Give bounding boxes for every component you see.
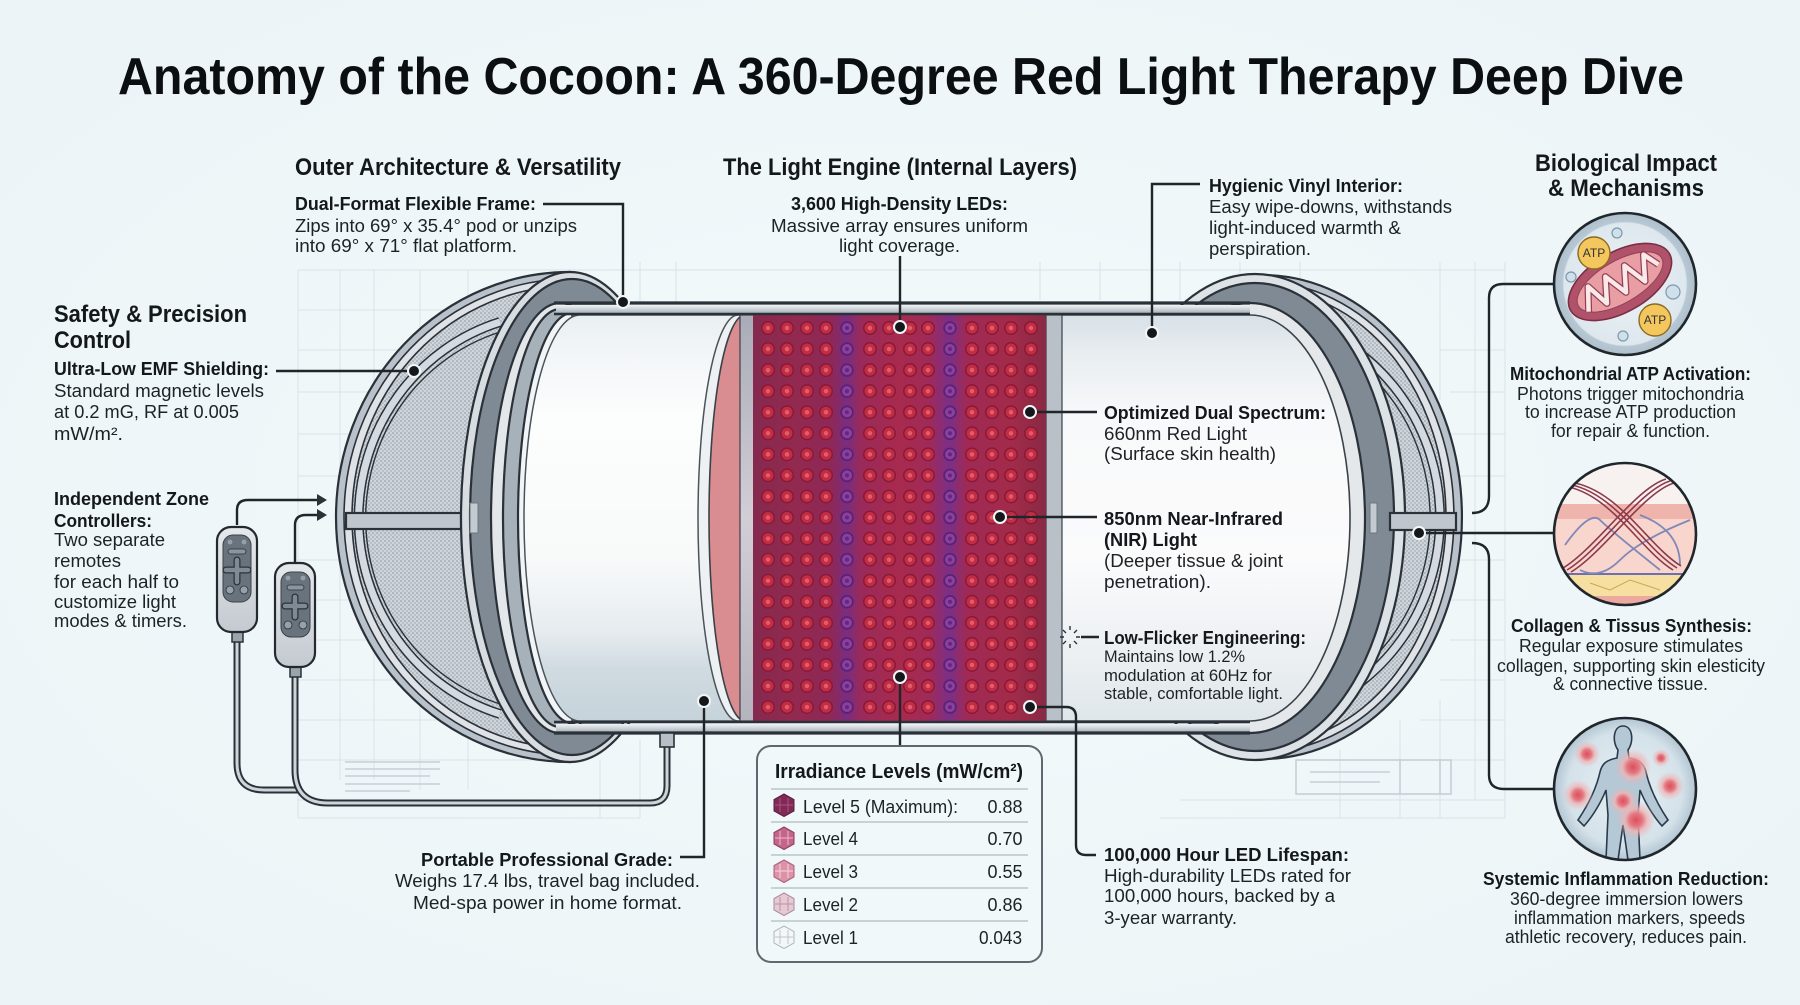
heading: safety and precision control: Safety & Precision bbox=[54, 301, 247, 328]
icon: collagen and skin layers bbox=[1552, 462, 1698, 606]
text: zone controllers: Independent Zone bbox=[54, 488, 209, 509]
blueprint notes block bbox=[345, 760, 1451, 794]
heading: safety and precision control bbox=[54, 301, 247, 354]
heading: light engine: The Light Engine (Internal Layers) bbox=[723, 154, 1077, 181]
row: level 5: 0.88 bbox=[987, 797, 1023, 817]
text: LED lifespan: High-durability LEDs rated for bbox=[1104, 866, 1351, 886]
illustration: cocoon pod bbox=[336, 272, 1462, 762]
heading: outer architecture: Outer Architecture & Versatility bbox=[295, 154, 622, 181]
heading: biological impact: & Mechanisms bbox=[1548, 175, 1704, 202]
text: dual spectrum bbox=[1104, 402, 1326, 464]
text: hygienic vinyl interior bbox=[1209, 175, 1452, 259]
text: near-infrared bbox=[1104, 508, 1283, 592]
text: hygienic vinyl interior: Easy wipe-downs, withstands bbox=[1209, 197, 1452, 217]
text: zone controllers: remotes bbox=[54, 551, 121, 571]
icon: mitochondrion: ATP bbox=[1644, 313, 1666, 327]
icon: flicker spark bbox=[1060, 626, 1080, 648]
text: inflammation reduction: athletic recovery, reduces pain. bbox=[1505, 927, 1747, 947]
right ring bbox=[1105, 274, 1456, 760]
LED panel bbox=[753, 315, 1046, 721]
text: 3,600 LEDs: 3,600 High-Density LEDs: bbox=[791, 193, 1008, 214]
text: EMF shielding: mW/m². bbox=[54, 424, 123, 444]
text: dual-format frame: into 69° x 71° flat platform. bbox=[295, 236, 517, 256]
text: low-flicker: modulation at 60Hz for bbox=[1104, 667, 1273, 685]
leader lines and dots bbox=[276, 184, 1553, 857]
title: Anatomy of the Cocoon: A 360-Degree Red Light Therapy Deep Dive bbox=[118, 48, 1684, 106]
text: near-infrared: (Deeper tissue & joint bbox=[1104, 551, 1283, 571]
text: mitochondrial ATP: to increase ATP production bbox=[1525, 402, 1736, 422]
text: LED lifespan: 100,000 Hour LED Lifespan: bbox=[1104, 844, 1349, 865]
arrows from remotes to pod bbox=[237, 494, 327, 563]
row: level 3 bbox=[774, 860, 1023, 882]
panel title: Irradiance Levels (mW/cm²) bbox=[775, 761, 1023, 783]
text: dual spectrum: (Surface skin health) bbox=[1104, 444, 1276, 464]
text: collagen synthesis: Regular exposure stimulates bbox=[1519, 636, 1743, 656]
remote cables bbox=[237, 642, 674, 803]
icon: mitochondrion bbox=[1554, 213, 1696, 355]
heading: biological impact bbox=[1535, 150, 1717, 202]
left mesh dome bbox=[336, 272, 570, 762]
row: level 2 bbox=[774, 893, 1023, 916]
white sliding cover bbox=[524, 315, 738, 721]
text: collagen synthesis: Collagen & Tissus Synthesis: bbox=[1511, 615, 1752, 636]
pink inner shell bbox=[700, 315, 742, 721]
remote 2 bbox=[275, 563, 315, 677]
text: mitochondrial ATP: Mitochondrial ATP Activation: bbox=[1510, 363, 1751, 384]
text: low-flicker: stable, comfortable light. bbox=[1104, 685, 1283, 703]
row: level 3: Level 3 bbox=[803, 862, 858, 882]
text: inflammation reduction: Systemic Inflammation Reduction: bbox=[1483, 868, 1769, 889]
text: mitochondrial ATP: Photons trigger mitochondria bbox=[1517, 384, 1745, 404]
text: LED lifespan bbox=[1104, 844, 1351, 928]
text: zone controllers: modes & timers. bbox=[54, 611, 187, 631]
heading: biological impact: Biological Impact bbox=[1535, 150, 1717, 177]
text: portable professional grade: Portable Professional Grade: bbox=[421, 849, 673, 870]
row: level 5 bbox=[774, 794, 1023, 817]
text: 3,600 LEDs: Massive array ensures uniform bbox=[771, 216, 1028, 236]
icon: body with inflammation points bbox=[1554, 718, 1696, 860]
text: EMF shielding bbox=[54, 358, 269, 444]
tube interior: vinyl right side bbox=[1050, 315, 1350, 721]
row: level 2: Level 2 bbox=[803, 895, 858, 915]
left ring bbox=[461, 272, 679, 762]
remote 1 bbox=[217, 527, 257, 642]
text: portable professional grade: Med-spa power in home format. bbox=[413, 893, 682, 913]
text: near-infrared: (NIR) Light bbox=[1104, 529, 1197, 550]
remote controllers bbox=[217, 494, 674, 803]
text: collagen synthesis: collagen, supporting skin elesticity bbox=[1497, 656, 1765, 676]
text: collagen synthesis: & connective tissue. bbox=[1553, 674, 1708, 694]
row: level 2: 0.86 bbox=[987, 895, 1023, 915]
text: collagen synthesis bbox=[1497, 615, 1765, 694]
row: level 5: Level 5 (Maximum): bbox=[803, 797, 958, 817]
text: low-flicker: Low-Flicker Engineering: bbox=[1104, 627, 1306, 648]
text: zone controllers bbox=[54, 488, 209, 631]
text: 3,600 LEDs bbox=[771, 193, 1028, 256]
right mesh dome bbox=[1262, 275, 1462, 759]
panel: irradiance levels bbox=[757, 746, 1042, 962]
row: level 4: 0.70 bbox=[987, 829, 1023, 849]
text: low-flicker: Maintains low 1.2% bbox=[1104, 648, 1245, 666]
blueprint grid background bbox=[298, 262, 1505, 818]
text: portable professional grade bbox=[395, 849, 700, 913]
row: level 3: 0.55 bbox=[987, 862, 1023, 882]
text: inflammation reduction bbox=[1483, 868, 1769, 947]
row: level 1 bbox=[774, 926, 1022, 948]
tube rim arc bbox=[572, 315, 745, 721]
text: dual-format frame bbox=[295, 193, 577, 256]
text: mitochondrial ATP: for repair & function. bbox=[1551, 421, 1710, 441]
text: LED lifespan: 100,000 hours, backed by a bbox=[1104, 886, 1336, 906]
text: dual-format frame: Dual-Format Flexible Frame: bbox=[295, 193, 536, 214]
text: near-infrared: 850nm Near-Infrared bbox=[1104, 508, 1283, 529]
text: EMF shielding: at 0.2 mG, RF at 0.005 bbox=[54, 402, 239, 422]
text: hygienic vinyl interior: perspiration. bbox=[1209, 239, 1311, 259]
text: dual spectrum: 660nm Red Light bbox=[1104, 424, 1247, 444]
text: 3,600 LEDs: light coverage. bbox=[839, 236, 960, 256]
row: level 4: Level 4 bbox=[803, 829, 858, 849]
text: inflammation reduction: 360-degree immersion lowers bbox=[1510, 889, 1743, 909]
text: zone controllers: Two separate bbox=[54, 530, 165, 550]
text: portable professional grade: Weighs 17.4 lbs, travel bag included. bbox=[395, 871, 700, 891]
text: EMF shielding: Standard magnetic levels bbox=[54, 381, 264, 401]
text: near-infrared: penetration). bbox=[1104, 572, 1211, 592]
text: hygienic vinyl interior: light-induced warmth & bbox=[1209, 218, 1401, 238]
row: level 1: 0.043 bbox=[979, 928, 1022, 948]
icon: mitochondrion: ATP bbox=[1583, 246, 1605, 260]
tube frame rails bbox=[554, 303, 1250, 733]
text: LED lifespan: 3-year warranty. bbox=[1104, 908, 1237, 928]
text: dual spectrum: Optimized Dual Spectrum: bbox=[1104, 402, 1326, 423]
row: level 4 bbox=[774, 827, 1023, 850]
text: EMF shielding: Ultra-Low EMF Shielding: bbox=[54, 358, 269, 379]
text: dual-format frame: Zips into 69° x 35.4° pod or unzips bbox=[295, 216, 577, 236]
text: inflammation reduction: inflammation markers, speeds bbox=[1514, 908, 1745, 928]
text: mitochondrial ATP bbox=[1510, 363, 1751, 441]
text: zone controllers: Controllers: bbox=[54, 510, 152, 531]
heading: safety and precision control: Control bbox=[54, 327, 131, 354]
edge strips beside LED panel bbox=[740, 315, 1062, 721]
row: level 1: Level 1 bbox=[803, 928, 858, 948]
text: hygienic vinyl interior: Hygienic Vinyl Interior: bbox=[1209, 175, 1403, 196]
text: low-flicker bbox=[1104, 627, 1306, 703]
text: zone controllers: for each half to bbox=[54, 572, 179, 592]
text: zone controllers: customize light bbox=[54, 592, 176, 612]
